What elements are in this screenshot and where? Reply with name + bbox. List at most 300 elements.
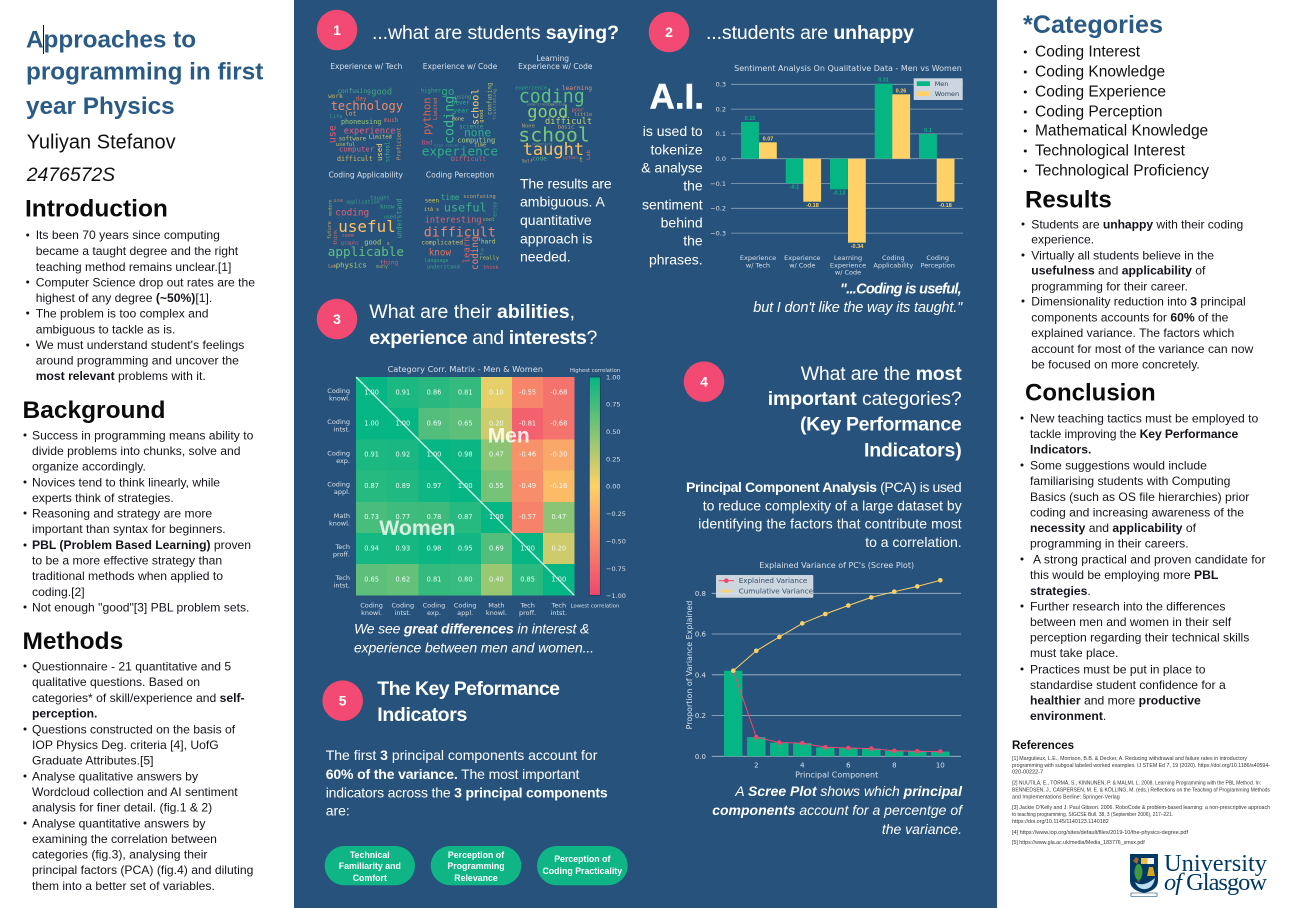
heading: section 5: Indicators [377, 704, 467, 726]
chart: scree plot: Proportion of Variance Explained [685, 601, 694, 729]
bar chart: sentiment analysis: -0.1 [790, 184, 799, 190]
word cloud: coding perception: time [441, 193, 460, 202]
word cloud: learning experience with code: understanding [527, 103, 554, 107]
heatmap: category correlation matrix: 0.65 [458, 420, 473, 428]
heatmap: category correlation matrix: Category Corr. Matrix - Men & Women [388, 364, 543, 374]
heading: conclusion: Conclusion [1025, 380, 1156, 407]
heading: references: References [1012, 740, 1074, 752]
text block: results: programming for their career. [1031, 280, 1188, 294]
word cloud: coding applicability: application [346, 200, 380, 206]
heatmap: category correlation matrix: 0.85 [520, 576, 535, 584]
word cloud: experience with code: time [474, 143, 486, 149]
heatmap: category correlation matrix: proff. [333, 550, 350, 558]
icon: crest shield [1130, 854, 1158, 896]
pill: technical familiarity and comfort: Technical [350, 850, 390, 860]
heatmap: category correlation matrix: knowl. [329, 519, 350, 527]
word cloud: coding perception: complicated [421, 239, 463, 246]
word cloud: coding perception: Fun [480, 247, 484, 255]
text block: methods: examining the correlation between [32, 832, 217, 846]
word cloud: experience with code: higher [421, 89, 442, 95]
chart: scree plot: 0.4 [695, 672, 707, 680]
text block: results: components accounts for 60% of the [1031, 310, 1229, 324]
heatmap: category correlation matrix: 0.80 [458, 576, 473, 584]
icon: number 3 badge [317, 299, 357, 339]
text block: conclusion [1020, 412, 1266, 723]
callout: A.I.: A.I. [650, 77, 704, 116]
text block: references: [3] Jackie O'Kelly and J. Paul Gibson. 2006. RoboCode & problem-based learning: a non-prescriptive approach [1012, 805, 1270, 811]
bar chart: sentiment analysis: Experience [784, 254, 820, 262]
heatmap: category correlation matrix: 0.10 [489, 388, 504, 396]
heatmap: category correlation matrix: 1.00 [364, 388, 379, 396]
text block: methods: categories* of skill/experience and self- [32, 691, 245, 705]
colour bar: 0.25 [606, 455, 620, 463]
heatmap: category correlation matrix: Tech [334, 543, 350, 551]
icon: number 4 badge [684, 361, 724, 402]
word cloud: experience with tech: Limited [369, 135, 392, 141]
list: categories: Mathematical Knowledge [1035, 123, 1208, 140]
text block: conclusion: coding and increasing awareness of the [1030, 506, 1244, 520]
pill: perception of programming relevance: Perception of [448, 850, 504, 860]
text block: conclusion: Further research into the differences [1030, 600, 1225, 614]
text block: references: to teaching programming. SIGCSE Bull. 38, 3 (September 2006), 217–221. [1012, 812, 1173, 818]
text block: results: usefulness and applicability of [1031, 264, 1206, 278]
list: categories: Technological Proficiency [1035, 163, 1209, 180]
word cloud: coding perception: cool [483, 217, 495, 223]
heatmap: category correlation matrix [327, 364, 626, 617]
heatmap: category correlation matrix: 0.55 [489, 482, 504, 490]
bar chart: sentiment analysis: 0.1 [716, 130, 726, 138]
word cloud: learning experience with code: None [522, 124, 535, 130]
word cloud: learning experience with code: t [579, 156, 583, 163]
legend: Women [935, 90, 959, 98]
label: women: Women [379, 517, 455, 540]
heatmap: category correlation matrix: 1.00 [364, 420, 379, 428]
bar chart: sentiment analysis: 0.26 [896, 88, 906, 94]
bar chart: sentiment analysis: Coding [926, 254, 949, 262]
colour bar: −0.25 [606, 510, 626, 518]
word cloud: experience with code: school [470, 89, 482, 125]
text block: introduction: highest of any degree (~50%)[1]. [36, 291, 212, 305]
word cloud: coding perception: think [483, 265, 498, 271]
heatmap: category correlation matrix: Coding [327, 449, 350, 457]
word cloud: experience with code: go [441, 85, 455, 98]
logo: University of Glasgow [1130, 850, 1268, 896]
word cloud: coding perception: learn [462, 237, 472, 263]
text block: conclusion: strategies. [1030, 584, 1091, 598]
text block: PCA: to reduce complexity of a large dataset by [703, 498, 962, 514]
callout: A.I.: behind [661, 214, 703, 230]
word cloud: experience with code [421, 82, 498, 163]
heatmap: category correlation matrix: 0.73 [364, 513, 379, 521]
text block: conclusion: familiarising students with Computing [1030, 474, 1230, 488]
panel: section 3, abilities, experience and interests [317, 299, 626, 655]
text block: methods: Wordcloud collection and AI sentiment [32, 785, 238, 799]
text block: background: Reasoning and strategy are more [32, 506, 212, 520]
word cloud: experience with tech: life [329, 114, 343, 120]
text block: key indicators: indicators across the 3 principal components [326, 784, 608, 800]
text block: conclusion: between men and women in their self [1030, 615, 1232, 629]
icon: number 5 badge: 5 [339, 693, 347, 709]
callout: A.I.: is used to [643, 123, 703, 139]
text block: results: Dimensionality reduction into 3 principal [1031, 294, 1246, 308]
bar chart: sentiment analysis: -0.18 [939, 203, 952, 209]
text block: background: Novices tend to think linearly, while [32, 476, 220, 490]
word cloud: coding applicability: understand [396, 199, 404, 238]
bar chart: sentiment analysis: Experience [740, 254, 776, 262]
text block: methods: Questionnaire - 21 quantitative and 5 [32, 660, 231, 674]
chart: scree plot: 8 [892, 762, 897, 770]
heading: background: Background [22, 397, 165, 424]
text block: references: [4] https://www.iop.org/sites/default/files/2019-10/the-physics-degree.pdf [1012, 830, 1189, 836]
bar chart: sentiment analysis: −0.2 [710, 205, 726, 213]
text block: introduction: Computer Science drop out rates are the [36, 275, 255, 289]
author: Yuliyan Stefanov [27, 131, 176, 153]
word cloud: coding applicability: graphs [341, 240, 359, 246]
panel: section 4, key performance indicators [684, 361, 964, 837]
heatmap: category correlation matrix: exp. [427, 609, 441, 617]
word cloud: experience with tech: difficult [337, 155, 373, 163]
text block: methods: principal factors (PCA) (fig.4) and diluting [32, 863, 253, 877]
heatmap: category correlation matrix: 0.81 [427, 576, 441, 584]
callout: A.I.: sentiment [642, 196, 703, 212]
chart: scree plot: 0.0 [695, 753, 706, 761]
heatmap: category correlation matrix: 1.00 [489, 513, 504, 521]
word cloud: coding applicability: many [376, 264, 388, 270]
text block: introduction: became a taught degree and the right [36, 244, 239, 258]
icon: number 2 badge [649, 12, 689, 52]
chart: scree plot: Explained Variance of PC's (Scree Plot) [759, 561, 914, 570]
text block: methods: Analyse quantitative answers by [32, 816, 206, 830]
heatmap: category correlation matrix: Coding [327, 481, 350, 489]
word cloud: experience with tech: computer [339, 144, 375, 153]
heatmap: category correlation matrix: knowl. [329, 394, 350, 402]
quote: "...Coding is useful, [840, 282, 962, 298]
word cloud: experience with tech: use [328, 125, 339, 143]
text block: results: explained variance. The factors which [1031, 326, 1234, 340]
bar chart: sentiment analysis: -0.13 [833, 190, 845, 196]
heatmap: category correlation matrix: appl. [457, 609, 473, 617]
word cloud: coding applicability: useful [338, 217, 396, 236]
text block: methods: them into a better set of variables. [32, 879, 215, 893]
list: categories: Coding Knowledge [1035, 64, 1165, 81]
word cloud: coding applicability: s [387, 241, 390, 247]
heading: section 3: What are their abilities, [369, 301, 575, 323]
legend: Men [935, 80, 948, 88]
text block: introduction: Its been 70 years since computing [36, 228, 220, 242]
word cloud: coding perception: coding [470, 236, 481, 270]
text block: introduction: The problem is too complex and [36, 307, 208, 321]
word cloud: coding perception: useful [444, 201, 487, 215]
bar chart: sentiment analysis: −0.3 [710, 229, 726, 237]
text block: PCA: Principal Component Analysis (PCA) is used [686, 479, 962, 495]
pill: perception of coding practicality [537, 846, 628, 885]
colour bar: Highest correlation [570, 368, 620, 374]
heatmap: category correlation matrix: -0.46 [519, 451, 536, 459]
callout: results ambiguous: The results are [520, 175, 612, 191]
heatmap: category correlation matrix: Coding [423, 602, 445, 610]
callout: results ambiguous: ambiguous. A [520, 194, 605, 210]
panel: section 5, the key performance indicators [322, 678, 628, 885]
heatmap: category correlation matrix: 0.92 [395, 451, 410, 459]
word cloud: learning experience with code: python [563, 155, 578, 160]
title: year Physics [26, 93, 175, 120]
heatmap: category correlation matrix: 1.00 [427, 451, 441, 459]
bar chart: sentiment analysis: -0.18 [806, 203, 819, 209]
word cloud titles: Experience w/ Code [423, 62, 498, 71]
text block: introduction [26, 228, 255, 383]
word cloud titles: Coding Applicability [328, 171, 404, 180]
word cloud: coding perception: enjoy [492, 202, 498, 217]
callout: A.I.: the [683, 232, 703, 248]
caption: differences between men and women: experience between men and women... [354, 639, 594, 655]
pill: technical familiarity and comfort: Comfort [353, 873, 387, 883]
heatmap: category correlation matrix: 0.47 [489, 451, 504, 459]
heatmap: category correlation matrix: -0.68 [550, 420, 567, 428]
title: Approaches to [26, 26, 196, 53]
caption: scree plot [712, 783, 964, 837]
title: programming in first [26, 58, 263, 86]
bar chart: sentiment analysis: -0.34 [851, 244, 864, 250]
bar chart: sentiment analysis: Coding [882, 254, 905, 262]
heatmap: category correlation matrix: 0.69 [427, 420, 441, 428]
callout: A.I.: the [683, 178, 703, 194]
text block: conclusion: healthier and more productive [1030, 694, 1201, 708]
word cloud: experience with tech: Proficient [396, 128, 402, 160]
text block: conclusion: A strong practical and proven candidate for [1033, 552, 1266, 566]
text block: methods: analysis for finer detail. (fig.1 & 2) [32, 800, 212, 814]
word cloud: coding applicability: seem [342, 233, 354, 239]
list: categories: Coding Interest [1035, 44, 1141, 61]
heatmap: category correlation matrix: 0.77 [395, 513, 410, 521]
panel: left column [22, 25, 263, 893]
panel: section 1, what students are saying [317, 10, 619, 271]
text block: PCA [686, 479, 962, 550]
word cloud: coding perception: seen [425, 198, 440, 205]
caption: differences between men and women [354, 620, 594, 655]
bar chart: sentiment analysis: 0.15 [745, 116, 755, 122]
word cloud: learning experience with code: little [574, 112, 592, 118]
text block: key indicators: The first 3 principal components account for [326, 747, 598, 763]
heatmap: category correlation matrix: 0.95 [458, 544, 473, 552]
heatmap: category correlation matrix: 1.00 [551, 576, 566, 584]
legend [914, 78, 963, 100]
callout: A.I.: tokenize [651, 142, 703, 158]
heatmap: category correlation matrix: 0.93 [395, 544, 410, 552]
caption: scree plot: components account for a percentge of [712, 802, 964, 818]
text block: results: Virtually all students believe in the [1031, 248, 1214, 262]
icon: number 3 badge: 3 [333, 311, 341, 327]
heatmap: category correlation matrix: Tech [519, 602, 535, 610]
chart: scree plot: 0.8 [695, 590, 706, 598]
panel: section 2, students are unhappy [641, 12, 963, 316]
bar chart: sentiment analysis: 0.1 [924, 128, 932, 134]
word cloud: experience with code: frustrating [492, 89, 498, 120]
word cloud: coding perception: understand [427, 265, 460, 271]
text block: PCA: identifying the factors that contribute most [698, 516, 962, 532]
heading: section 4: (Key Performance [800, 414, 962, 436]
text block: methods [24, 660, 253, 893]
text block: background: coding.[2] [32, 585, 85, 599]
heatmap: category correlation matrix: appl. [334, 488, 350, 496]
word cloud: coding applicability: coding [335, 208, 369, 219]
word cloud: coding perception: really [479, 256, 500, 262]
word cloud: coding applicability: future [327, 221, 333, 239]
chart: scree plot: 0.2 [695, 712, 706, 720]
text block: background: Not enough "good"[3] PBL problem sets. [32, 600, 249, 614]
bar chart: sentiment analysis [710, 64, 963, 277]
text block: conclusion: must take place. [1030, 646, 1118, 660]
heatmap: category correlation matrix: -0.30 [550, 451, 567, 459]
text block: introduction: ambiguous to tackle as is. [36, 322, 175, 336]
text block: results: account for most of the variance can now [1031, 342, 1254, 356]
word cloud: learning experience with code: teaching [548, 103, 565, 107]
chart: scree plot [685, 561, 961, 780]
list: categories: Coding Experience [1035, 84, 1166, 101]
heading: section 4: important categories? [768, 388, 962, 410]
text block: references: [5] https://www.gla.ac.uk/media/Media_183776_smxx.pdf [1012, 840, 1145, 846]
pill: perception of coding practicality: Coding Practicality [542, 866, 622, 876]
bar chart: sentiment analysis: Applicability [873, 262, 913, 270]
word cloud: learning experience with code: poor [572, 108, 584, 114]
student number: 2476572S [26, 164, 115, 186]
word cloud: learning experience with code: experience [515, 85, 547, 91]
list: categories: Coding Perception [1035, 104, 1163, 121]
heatmap: category correlation matrix: -0.49 [519, 482, 536, 490]
colour bar: −0.75 [606, 565, 626, 573]
word cloud titles [328, 54, 593, 180]
word cloud: experience with tech: technology [331, 99, 403, 113]
word cloud: coding applicability: Lab [328, 263, 337, 269]
heatmap: category correlation matrix: proff. [519, 609, 536, 617]
list: categories: Technological Interest [1035, 143, 1186, 160]
pill: perception of programming relevance: Programming [447, 861, 505, 871]
heatmap: category correlation matrix: 0.69 [489, 544, 504, 552]
heatmap: category correlation matrix: 0.94 [364, 544, 379, 552]
text block: conclusion: standardise student confidence for a [1030, 678, 1226, 692]
heading: results: Results [1025, 186, 1112, 213]
heatmap: category correlation matrix: 0.86 [427, 388, 441, 396]
bar chart: sentiment analysis: Experience [830, 262, 866, 270]
heatmap: category correlation matrix: -0.68 [550, 388, 567, 396]
word cloud: learning experience with code: Self [522, 158, 533, 164]
word cloud: experience with tech: much [384, 117, 399, 124]
word cloud: coding applicability: applicable [328, 244, 404, 259]
title [26, 25, 263, 120]
text block: conclusion: Practices must be put in place to [1030, 662, 1206, 676]
heading: section 3: experience and interests? [369, 327, 597, 349]
text block: conclusion: perception regarding their technical skills [1030, 630, 1249, 644]
heatmap: category correlation matrix: intst. [395, 609, 411, 617]
text block: methods: Graduate Attributes.[5] [32, 754, 153, 768]
word cloud: experience with tech: phoneusing [341, 118, 381, 126]
word cloud: experience with code: Limited [433, 98, 439, 120]
text block: key indicators: are: [326, 803, 350, 819]
word cloud: learning experience with code: university [532, 142, 553, 146]
heatmap: category correlation matrix: 0.87 [458, 513, 473, 521]
bar chart: sentiment analysis: −0.1 [710, 180, 726, 188]
chart: scree plot: Principal Component [795, 770, 878, 780]
word cloud: coding perception: sconfusing [463, 194, 496, 200]
text block: conclusion: necessity and applicability of [1030, 521, 1197, 535]
word cloud: coding perception: interesting [425, 216, 482, 226]
heatmap: category correlation matrix: Math [334, 512, 350, 520]
heading: section 4: Indicators) [864, 440, 962, 462]
heatmap: category correlation matrix: 0.98 [427, 544, 441, 552]
colour bar: Lowest correlation [571, 604, 619, 610]
logo: University of Glasgow: University [1164, 850, 1268, 877]
pill: technical familiarity and comfort [325, 846, 415, 885]
pill: technical familiarity and comfort: Familiarity and [339, 861, 401, 871]
word cloud: learning experience with code: coding [519, 87, 585, 108]
icon: number 1 badge [317, 10, 357, 50]
word cloud: experience with code: year [453, 107, 469, 115]
text block: references: and Implementations Berline: Springer-Verlag [1012, 794, 1120, 800]
word cloud: experience with code: using [455, 95, 471, 101]
bar chart: sentiment analysis: w/ Tech [746, 262, 770, 270]
word cloud: coding perception: know [429, 248, 451, 259]
icon: number 1 badge: 1 [333, 22, 341, 38]
text block: results: Students are unhappy with their coding [1031, 218, 1243, 232]
text block: references: BENNEDSEN, J., CASPERSEN, M. E. & KÖLLING, M. (eds.) Reflections on the Teaching of Programming Methods [1012, 786, 1270, 794]
text block: results [1022, 218, 1254, 372]
bar chart: sentiment analysis: 0.07 [763, 136, 773, 142]
pill: perception of programming relevance: Relevance [454, 873, 498, 883]
word cloud: coding applicability: thing [380, 259, 398, 266]
text block: background: divide problems into chunks, solve and [32, 444, 241, 458]
word cloud: learning experience with code: code [532, 155, 547, 162]
panel: centre background [294, 0, 997, 908]
text block: background: organize accordingly. [32, 460, 146, 474]
word cloud: learning experience with code: Lab [586, 150, 592, 160]
heatmap: category correlation matrix: 0.78 [427, 513, 441, 521]
heading: section 5: The Key Peformance [377, 678, 560, 700]
text block: conclusion: Indicators. [1030, 442, 1091, 456]
word cloud: experience with tech: useful [336, 142, 356, 148]
text block: methods: IOP Physics Deg. criteria [4], UofG [32, 738, 219, 752]
text block: conclusion: programming in their careers. [1030, 536, 1189, 550]
caption: scree plot: the variance. [882, 821, 962, 837]
heatmap: category correlation matrix: 0.65 [364, 576, 379, 584]
heading: introduction: Introduction [25, 196, 168, 223]
heatmap: category correlation matrix: 0.91 [395, 388, 410, 396]
word cloud: experience with code: confusing [486, 82, 494, 115]
text block: methods: Questions constructed on the basis of [32, 722, 236, 736]
text block: results: be focused on more concretely. [1031, 358, 1200, 372]
heatmap: category correlation matrix: Coding [360, 602, 383, 610]
word cloud: learning experience with code: learning [562, 85, 592, 92]
word cloud: coding applicability [327, 195, 404, 270]
quote: but I don't like the way its taught." [753, 300, 963, 316]
text block: conclusion: Some suggestions would include [1030, 458, 1207, 472]
text block: conclusion: environment. [1030, 709, 1106, 723]
heatmap: category correlation matrix: Tech [334, 574, 350, 582]
text block: references: [2] NUUTILA, E., TÖRMÄ, S., KINNUNEN, P. & MALMI, L. 2008. Learning Programming with the PBL Method. In: [1012, 780, 1261, 786]
word cloud: experience with code: never [452, 100, 470, 106]
text block: references: 020-00222-7 [1012, 770, 1043, 776]
bar chart: sentiment analysis: 0.3 [716, 81, 726, 89]
text block: conclusion: Basics (such as OS file hierarchies) prior [1030, 490, 1249, 504]
text block: references [1012, 756, 1270, 846]
word cloud: coding applicability: taught [370, 195, 390, 201]
heatmap: category correlation matrix: 0.91 [364, 451, 379, 459]
word cloud titles: Learning [536, 54, 569, 63]
heatmap: category correlation matrix: -0.16 [550, 482, 567, 490]
text block: introduction: We must understand student's feelings [36, 338, 244, 352]
word cloud: experience with tech: confusing [337, 88, 371, 95]
heading: section 2: ...students are unhappy [706, 22, 914, 44]
text block: references: programming with subgoal labeled worked examples. IJ STEM Ed 7, 19 (2020). https://doi.org/10.1186/s40594- [1012, 763, 1270, 769]
heatmap: category correlation matrix: Tech [551, 602, 566, 610]
